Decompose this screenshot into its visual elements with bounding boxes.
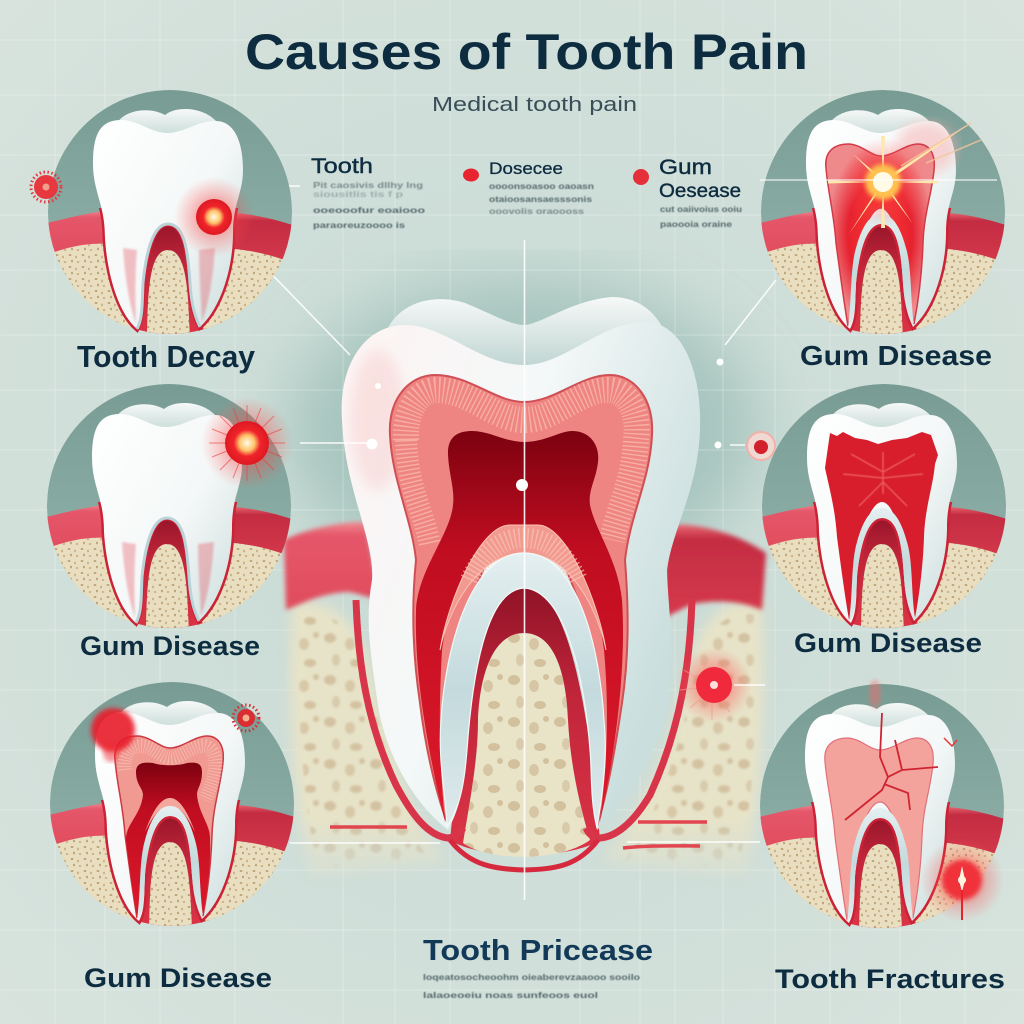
dentin xyxy=(115,736,223,918)
body text: disease: oooonsoasoo oaoasn xyxy=(489,181,594,191)
inner root white band xyxy=(847,808,913,922)
tooth xyxy=(117,701,219,750)
panel: gum disease middle left xyxy=(32,384,312,637)
label: gum disease middle left: Gum Disease xyxy=(80,631,260,661)
bottom body text xyxy=(423,972,640,1000)
panel: cavity tooth middle right xyxy=(747,384,1024,637)
pain glow xyxy=(920,838,1004,922)
body text: disease xyxy=(489,181,594,216)
pointer dots xyxy=(366,358,724,491)
pain spot near right root xyxy=(676,647,752,723)
body text: disease: ooovolis oraoooss xyxy=(489,206,584,216)
bottom heading: Tooth Pricease xyxy=(423,935,653,967)
enamel xyxy=(342,322,700,830)
body text: gum disease: cut oaiivoius ooiu xyxy=(660,204,742,214)
dentin xyxy=(826,144,934,326)
label: tooth decay: Tooth Decay xyxy=(77,339,256,374)
tooth xyxy=(92,403,242,623)
teal haze behind the main tooth xyxy=(289,280,759,580)
outer red root lines xyxy=(356,600,692,838)
bullet: gum disease xyxy=(633,169,649,185)
central bone and inner arch xyxy=(450,586,600,857)
inner root white band xyxy=(849,508,915,622)
tooth xyxy=(93,109,243,329)
body text: gum disease xyxy=(660,204,742,229)
bottom body text: loqeatosocheoohm oieaberevzaaooo sooilo xyxy=(423,972,640,982)
decay stain xyxy=(91,708,135,762)
label: gum disease top right: Gum Disease xyxy=(800,340,992,371)
tooth xyxy=(828,109,930,158)
disc: gum and bone xyxy=(32,384,312,637)
inner root white band xyxy=(848,214,914,328)
panel: tooth decay xyxy=(31,90,313,343)
pulp xyxy=(126,763,210,918)
bullet: disease xyxy=(463,168,479,182)
germ xyxy=(31,172,61,202)
top glow xyxy=(869,680,881,708)
body text: tooth: paraoreuzoooo is xyxy=(313,220,405,230)
decay spot xyxy=(174,177,254,257)
enamel pink tint xyxy=(896,122,956,174)
inner root white band xyxy=(137,806,203,920)
label: gum disease middle right: Gum Disease xyxy=(794,628,982,658)
bottom body text: lalaoeoeiu noas sunfeoos euol xyxy=(423,990,598,1000)
panel: decay with pulp bottom left xyxy=(35,682,315,935)
disc: gum and bone xyxy=(746,90,1024,343)
body text: disease: otaioosansaesssonis xyxy=(489,194,592,204)
panel: main tooth cross-section xyxy=(284,297,766,878)
enamel xyxy=(806,120,956,329)
base red U xyxy=(450,840,598,870)
chip mark xyxy=(944,738,957,746)
enamel xyxy=(95,712,245,921)
body text: tooth: siousitlis tis f p xyxy=(313,189,403,199)
disc: gum and bone xyxy=(747,384,1024,637)
burst of pain xyxy=(828,120,975,234)
tooth xyxy=(829,403,931,452)
label: gum disease bottom left: Gum Disease xyxy=(84,963,272,993)
disc: gum and bone xyxy=(745,684,1024,937)
panel: fractured tooth bottom right xyxy=(745,680,1024,937)
body text: tooth: ooeooofur eoaiooo xyxy=(313,205,425,215)
dentin xyxy=(825,738,933,920)
fracture crack xyxy=(845,713,938,820)
text column: disease xyxy=(463,159,594,216)
crown back xyxy=(385,297,666,400)
heading: disease: Dosecee xyxy=(489,159,563,178)
text column: tooth xyxy=(311,155,425,230)
heading: gum: Gum xyxy=(659,156,712,179)
enamel xyxy=(805,714,955,923)
enamel blush xyxy=(350,350,406,490)
pain spot xyxy=(201,397,293,489)
tooth xyxy=(827,703,929,752)
inner dentin arch xyxy=(440,525,606,650)
body text: gum disease: paoooia oraine xyxy=(660,219,732,229)
disc: gum and bone xyxy=(33,90,313,343)
pulp fibres xyxy=(843,452,923,506)
panel: pulpitis tooth top right xyxy=(746,90,1024,343)
label: tooth fractures: Tooth Fractures xyxy=(775,964,1005,994)
inner blue-white root band xyxy=(440,553,605,828)
heading: disease line: Oesease xyxy=(659,181,741,202)
cavity and pulp xyxy=(825,432,938,620)
gum left xyxy=(284,522,380,610)
body text: tooth: Pit caosivis dllhy lng xyxy=(313,180,423,190)
dentin stripes xyxy=(125,746,215,800)
dentin xyxy=(390,375,652,826)
pointer line xyxy=(760,179,997,181)
title: Causes of Tooth Pain xyxy=(245,24,808,80)
rays xyxy=(901,123,981,166)
center line xyxy=(524,240,526,900)
bone xyxy=(290,601,763,878)
enamel xyxy=(807,414,957,623)
pulp chamber and canals xyxy=(416,431,623,822)
marker: small red circle xyxy=(747,432,775,460)
pink arch xyxy=(145,798,195,832)
gum right xyxy=(660,525,766,620)
subtitle: Medical tooth pain xyxy=(432,94,637,116)
text column: gum disease xyxy=(633,156,742,229)
pointer lines xyxy=(200,186,776,843)
body text: tooth xyxy=(313,180,425,230)
heading: tooth: Tooth xyxy=(311,155,373,178)
disc: gum and bone xyxy=(35,682,315,935)
germ xyxy=(233,705,259,731)
red ticks xyxy=(330,822,707,848)
